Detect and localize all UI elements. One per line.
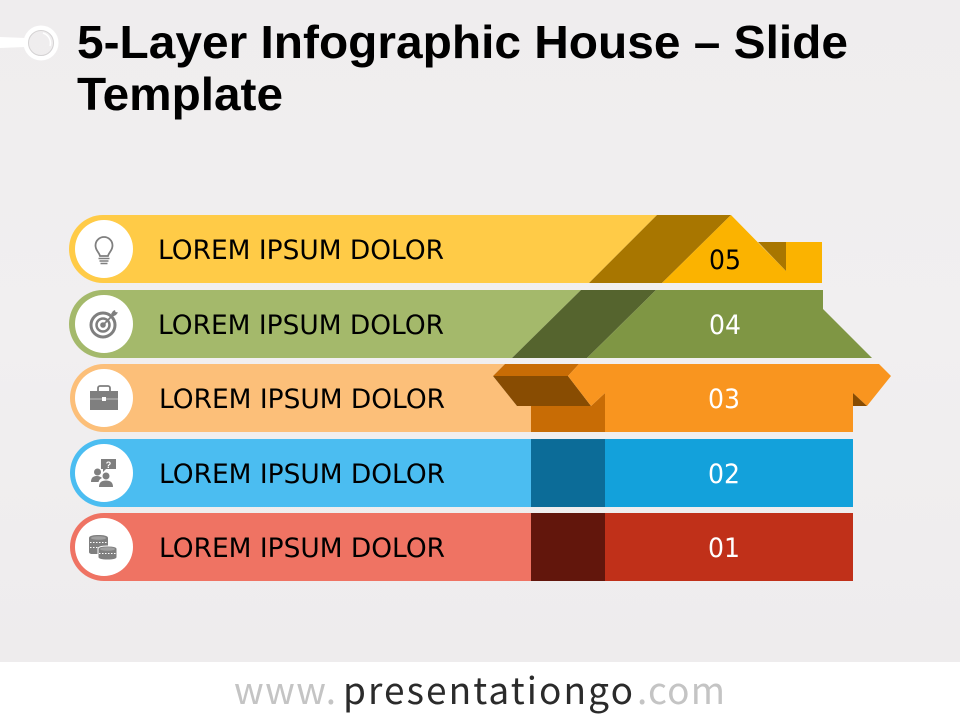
layer 02 wall	[605, 439, 853, 507]
layer 03 roof and wall	[568, 364, 891, 432]
layer 03	[70, 364, 891, 432]
label: layer 05: LOREM IPSUM DOLOR	[158, 235, 444, 266]
layer 05 label band	[69, 215, 657, 283]
layer 01 wall	[605, 513, 853, 581]
layer 05 chimney shadow	[758, 242, 786, 271]
layer 03 label band	[70, 364, 531, 432]
footer website url: presentationgo	[343, 661, 633, 715]
icon: title ring pin	[0, 28, 56, 58]
layer 01 number: 01	[708, 533, 740, 564]
footer website url: .com	[637, 661, 725, 715]
layer 04	[69, 290, 872, 358]
layer 03 eave shadow	[493, 376, 591, 406]
layer 05	[69, 215, 822, 283]
label: layer 03: LOREM IPSUM DOLOR	[159, 384, 445, 415]
layer 02 number: 02	[708, 459, 740, 490]
title: Template	[77, 68, 283, 120]
label: layer 02: LOREM IPSUM DOLOR	[159, 459, 445, 490]
layer 03 right eave shadow	[853, 393, 867, 406]
layer 02 wall shadow	[531, 439, 605, 507]
layer 05 roof shadow	[589, 215, 731, 283]
layer 04 roof	[587, 290, 872, 358]
title: 5-Layer Infographic House – Slide	[77, 16, 848, 68]
layer 01 wall shadow	[531, 513, 605, 581]
layer 03 number: 03	[708, 384, 740, 415]
layer 02	[70, 439, 853, 507]
icon: light bulb	[75, 220, 133, 278]
layer 04 label band	[69, 290, 581, 358]
layer 03 wall shadow	[531, 393, 605, 432]
icon: people with question bubble: ?	[106, 460, 111, 470]
layer 05 roof	[662, 215, 822, 283]
label: layer 04: LOREM IPSUM DOLOR	[158, 310, 444, 341]
icon: people with question bubble	[75, 444, 133, 502]
layer 01	[70, 513, 853, 581]
layer 05 number: 05	[709, 245, 741, 276]
layer 01 label band	[70, 513, 531, 581]
footer website url: www.	[234, 661, 336, 715]
icon: coins	[75, 518, 133, 576]
layer 02 label band	[70, 439, 531, 507]
layer 04 number: 04	[709, 310, 741, 341]
label: layer 01: LOREM IPSUM DOLOR	[159, 533, 445, 564]
layer 03 eave top shadow	[493, 364, 579, 376]
layer 04 roof shadow	[512, 290, 656, 358]
icon: briefcase	[75, 369, 133, 427]
icon: target	[75, 295, 133, 353]
